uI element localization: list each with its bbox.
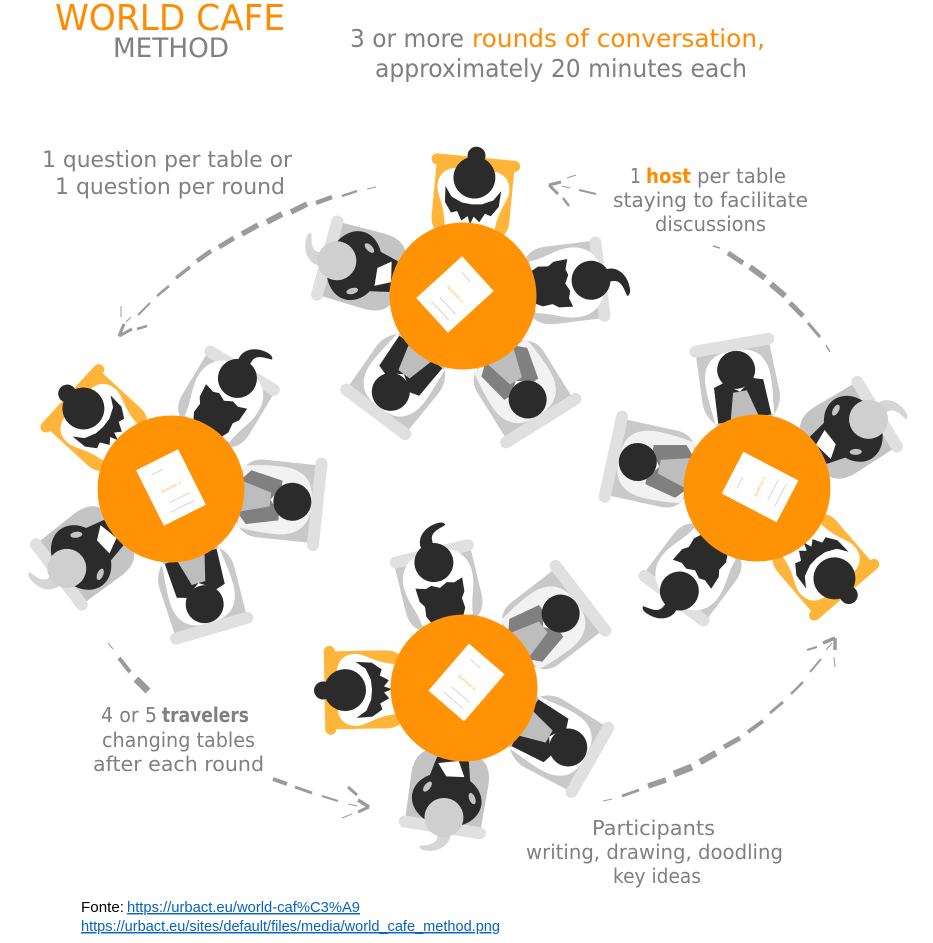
heading: rounds of conversation: approximately 20 minutes each	[375, 54, 747, 83]
text: travelers: changing tables	[102, 728, 255, 752]
panel: right table group: Question 3	[752, 476, 767, 498]
text: host per table: 1	[630, 164, 641, 188]
arrow: bottom table to right table	[603, 638, 835, 801]
text: host per table: discussions	[655, 212, 766, 236]
title: METHOD	[113, 33, 229, 64]
heading: rounds of conversation	[350, 24, 765, 83]
text: travelers	[93, 703, 264, 776]
arrow: right table to top table	[549, 175, 830, 352]
text: participants	[526, 816, 783, 888]
text: question per table	[42, 148, 293, 200]
text: host per table: per table	[697, 164, 786, 188]
title	[55, 0, 285, 64]
arrow: left table to bottom table	[108, 643, 369, 818]
text: travelers: 4 or 5	[101, 703, 157, 727]
panel: right table group	[605, 338, 919, 644]
text: question per table: 1 question per table or	[42, 148, 293, 173]
text: host per table: host	[646, 164, 691, 188]
panel: left table group: Question 2	[160, 480, 182, 494]
text: host per table	[613, 164, 808, 236]
text: question per table: 1 question per round	[55, 175, 285, 200]
panel: bottom table group: Question 4	[457, 673, 477, 691]
text: travelers: travelers	[162, 703, 249, 727]
panel: left table group	[15, 326, 321, 639]
source footer: https://urbact.eu/sites/default/files/media/world_cafe_method.png	[81, 919, 500, 935]
arrow: top table to left table	[119, 187, 376, 336]
text: host per table: staying to facilitate	[613, 188, 808, 212]
heading: rounds of conversation: 3 or more	[350, 24, 464, 53]
heading: rounds of conversation: rounds of conversation,	[472, 24, 765, 53]
panel: top table group: Question 1	[446, 284, 465, 304]
panel: top table group	[292, 143, 633, 442]
source footer: Fonte:	[81, 900, 124, 916]
text: participants: key ideas	[613, 864, 701, 888]
source footer: https://urbact.eu/world-caf%C3%A9	[127, 900, 360, 916]
text: participants: Participants	[592, 816, 715, 840]
text: participants: writing, drawing, doodling	[526, 840, 783, 864]
source footer	[81, 900, 500, 935]
text: travelers: after each round	[93, 752, 264, 776]
panel: bottom table group	[313, 517, 609, 859]
